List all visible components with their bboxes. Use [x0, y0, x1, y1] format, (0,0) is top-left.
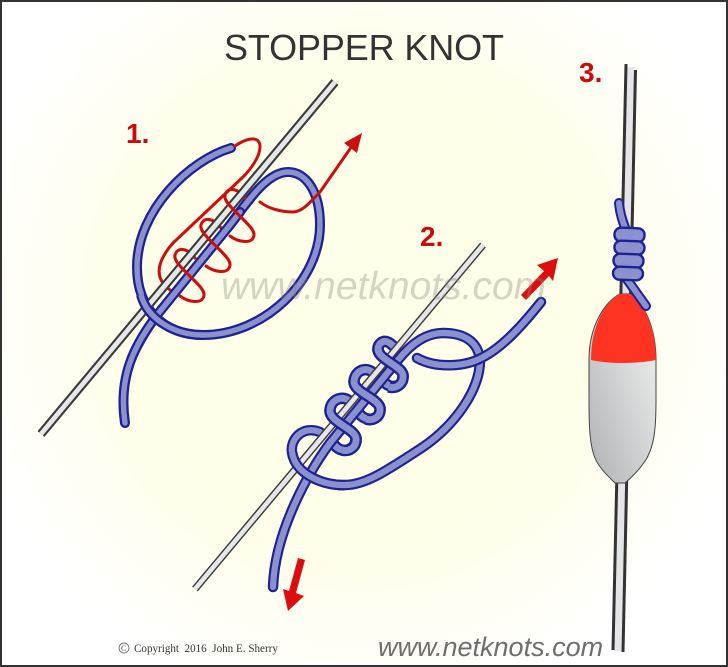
step 2: arrow down — [283, 558, 305, 611]
step 2: loop crossing over line — [292, 452, 345, 485]
step 1 diagram — [41, 82, 362, 434]
step 2: back of coils — [330, 341, 403, 450]
step 1 label: 1. — [126, 118, 149, 149]
step 2 label: 2. — [420, 221, 443, 252]
step 3 label: 3. — [579, 57, 602, 88]
step 3 diagram — [589, 64, 656, 652]
step 1: red coil diagonals — [175, 195, 254, 295]
step 1: blue loop front crossing — [141, 295, 203, 335]
watermark: www.netknots.com — [221, 265, 546, 308]
step 1: blue strand front — [123, 212, 240, 423]
step 1: red arrow — [260, 133, 362, 212]
step 2: fishing line — [195, 245, 483, 589]
step 2 diagram — [195, 245, 558, 611]
step 1: fishing line — [41, 82, 335, 434]
website footer: www.netknots.com — [378, 632, 603, 662]
step 2: arrow up right — [521, 258, 558, 300]
step 3: knot wraps — [613, 227, 645, 281]
step 2: big loop and main strand — [273, 333, 480, 587]
step 3: float — [589, 294, 656, 483]
step 1: red tag going behind — [159, 139, 260, 290]
copyright: C — [121, 644, 126, 653]
step 1: blue loop — [137, 148, 320, 335]
title: STOPPER KNOT — [224, 27, 504, 68]
copyright: Copyright 2016 John E. Sherry — [134, 643, 278, 655]
step 3: knot tag ends — [619, 203, 646, 306]
step 2: working end — [417, 302, 541, 365]
step 1: red coil back parts — [175, 189, 254, 302]
step 2: front of coils — [330, 345, 403, 450]
step 3: fishing line — [613, 64, 636, 652]
